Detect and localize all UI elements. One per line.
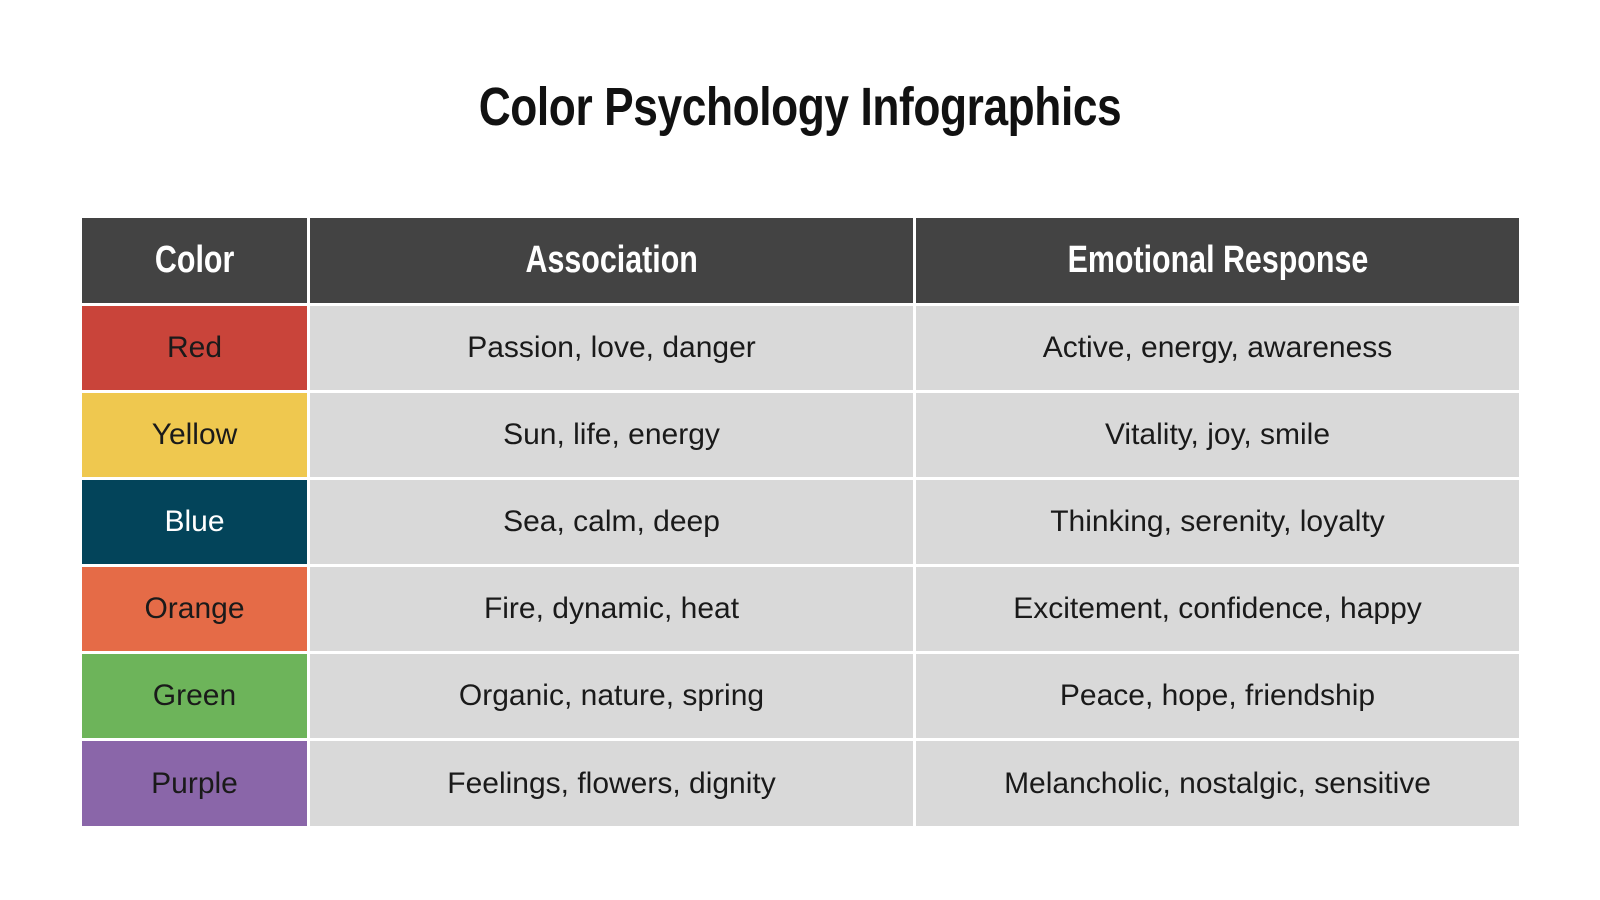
row: purple [82, 741, 307, 826]
row: blue: Blue [164, 505, 225, 538]
table: Melancholic, nostalgic, sensitive [1004, 766, 1431, 800]
header: emotional response [916, 218, 1519, 303]
table: Sun, life, energy [503, 418, 720, 451]
row: yellow [82, 393, 307, 477]
table: Feelings, flowers, dignity [447, 766, 776, 800]
table: Peace, hope, friendship [1060, 679, 1375, 712]
header: emotional response: Emotional Response [1067, 239, 1368, 281]
row: orange: Orange [144, 592, 245, 625]
title: Color Psychology Infographics [479, 77, 1121, 137]
table: Excitement, confidence, happy [1013, 592, 1422, 625]
table: Sea, calm, deep [503, 505, 720, 538]
row: green: Green [153, 679, 236, 712]
row: red: Red [167, 331, 222, 364]
header: color: Color [155, 239, 234, 281]
row: green [82, 654, 307, 738]
row: purple: Purple [151, 766, 238, 800]
table: Passion, love, danger [467, 331, 756, 364]
table: Organic, nature, spring [459, 679, 764, 712]
header: color [82, 218, 307, 303]
table: Fire, dynamic, heat [484, 592, 739, 625]
table: Thinking, serenity, loyalty [1050, 505, 1385, 538]
table: Vitality, joy, smile [1105, 418, 1330, 451]
header: association: Association [525, 239, 698, 281]
row: blue [82, 480, 307, 564]
header: association [310, 218, 913, 303]
row: yellow: Yellow [152, 418, 237, 451]
row: red [82, 306, 307, 390]
table: Active, energy, awareness [1043, 331, 1392, 364]
row: orange [82, 567, 307, 651]
